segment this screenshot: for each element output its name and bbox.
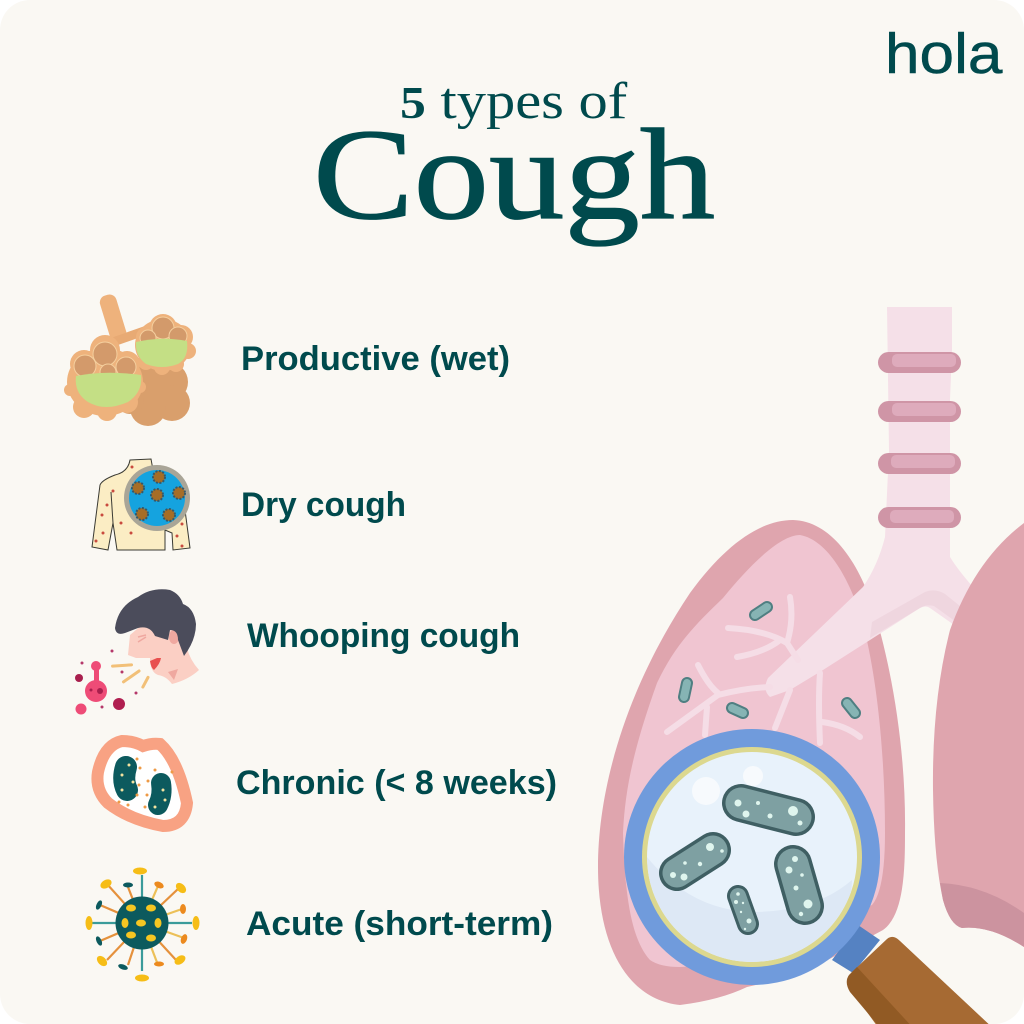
icon: person coughing bbox=[75, 589, 199, 714]
label: Chronic (< 8 weeks): Chronic (< 8 weeks) bbox=[236, 764, 557, 802]
label: Dry cough: Dry cough bbox=[241, 486, 406, 524]
icon: torso with virus lens bbox=[92, 459, 190, 550]
logo: hola: hola bbox=[885, 21, 1003, 85]
magnifier lens bbox=[624, 729, 880, 985]
right lung bbox=[933, 523, 1024, 947]
large bacteria bbox=[670, 800, 812, 930]
trachea and bronchi bbox=[765, 307, 975, 697]
icon: alveoli with mucus bbox=[64, 293, 196, 426]
title line: Cough: Cough bbox=[313, 103, 715, 247]
icon: virus bbox=[86, 868, 200, 982]
left lung bbox=[598, 520, 905, 1005]
label: Whooping cough: Whooping cough bbox=[247, 617, 520, 655]
title bbox=[313, 72, 715, 247]
magnifier handle bbox=[832, 925, 995, 1024]
trachea rings bbox=[878, 352, 961, 528]
label: Productive (wet): Productive (wet) bbox=[241, 340, 510, 378]
bronchial branches bbox=[667, 597, 860, 743]
small bacteria bbox=[684, 607, 855, 713]
title line: 5 types of: 5 types of bbox=[400, 72, 628, 129]
label: Acute (short-term): Acute (short-term) bbox=[246, 905, 553, 943]
illustration: lungs with magnifier bbox=[598, 307, 1024, 1024]
icon: bacteria in airway bbox=[97, 741, 187, 826]
